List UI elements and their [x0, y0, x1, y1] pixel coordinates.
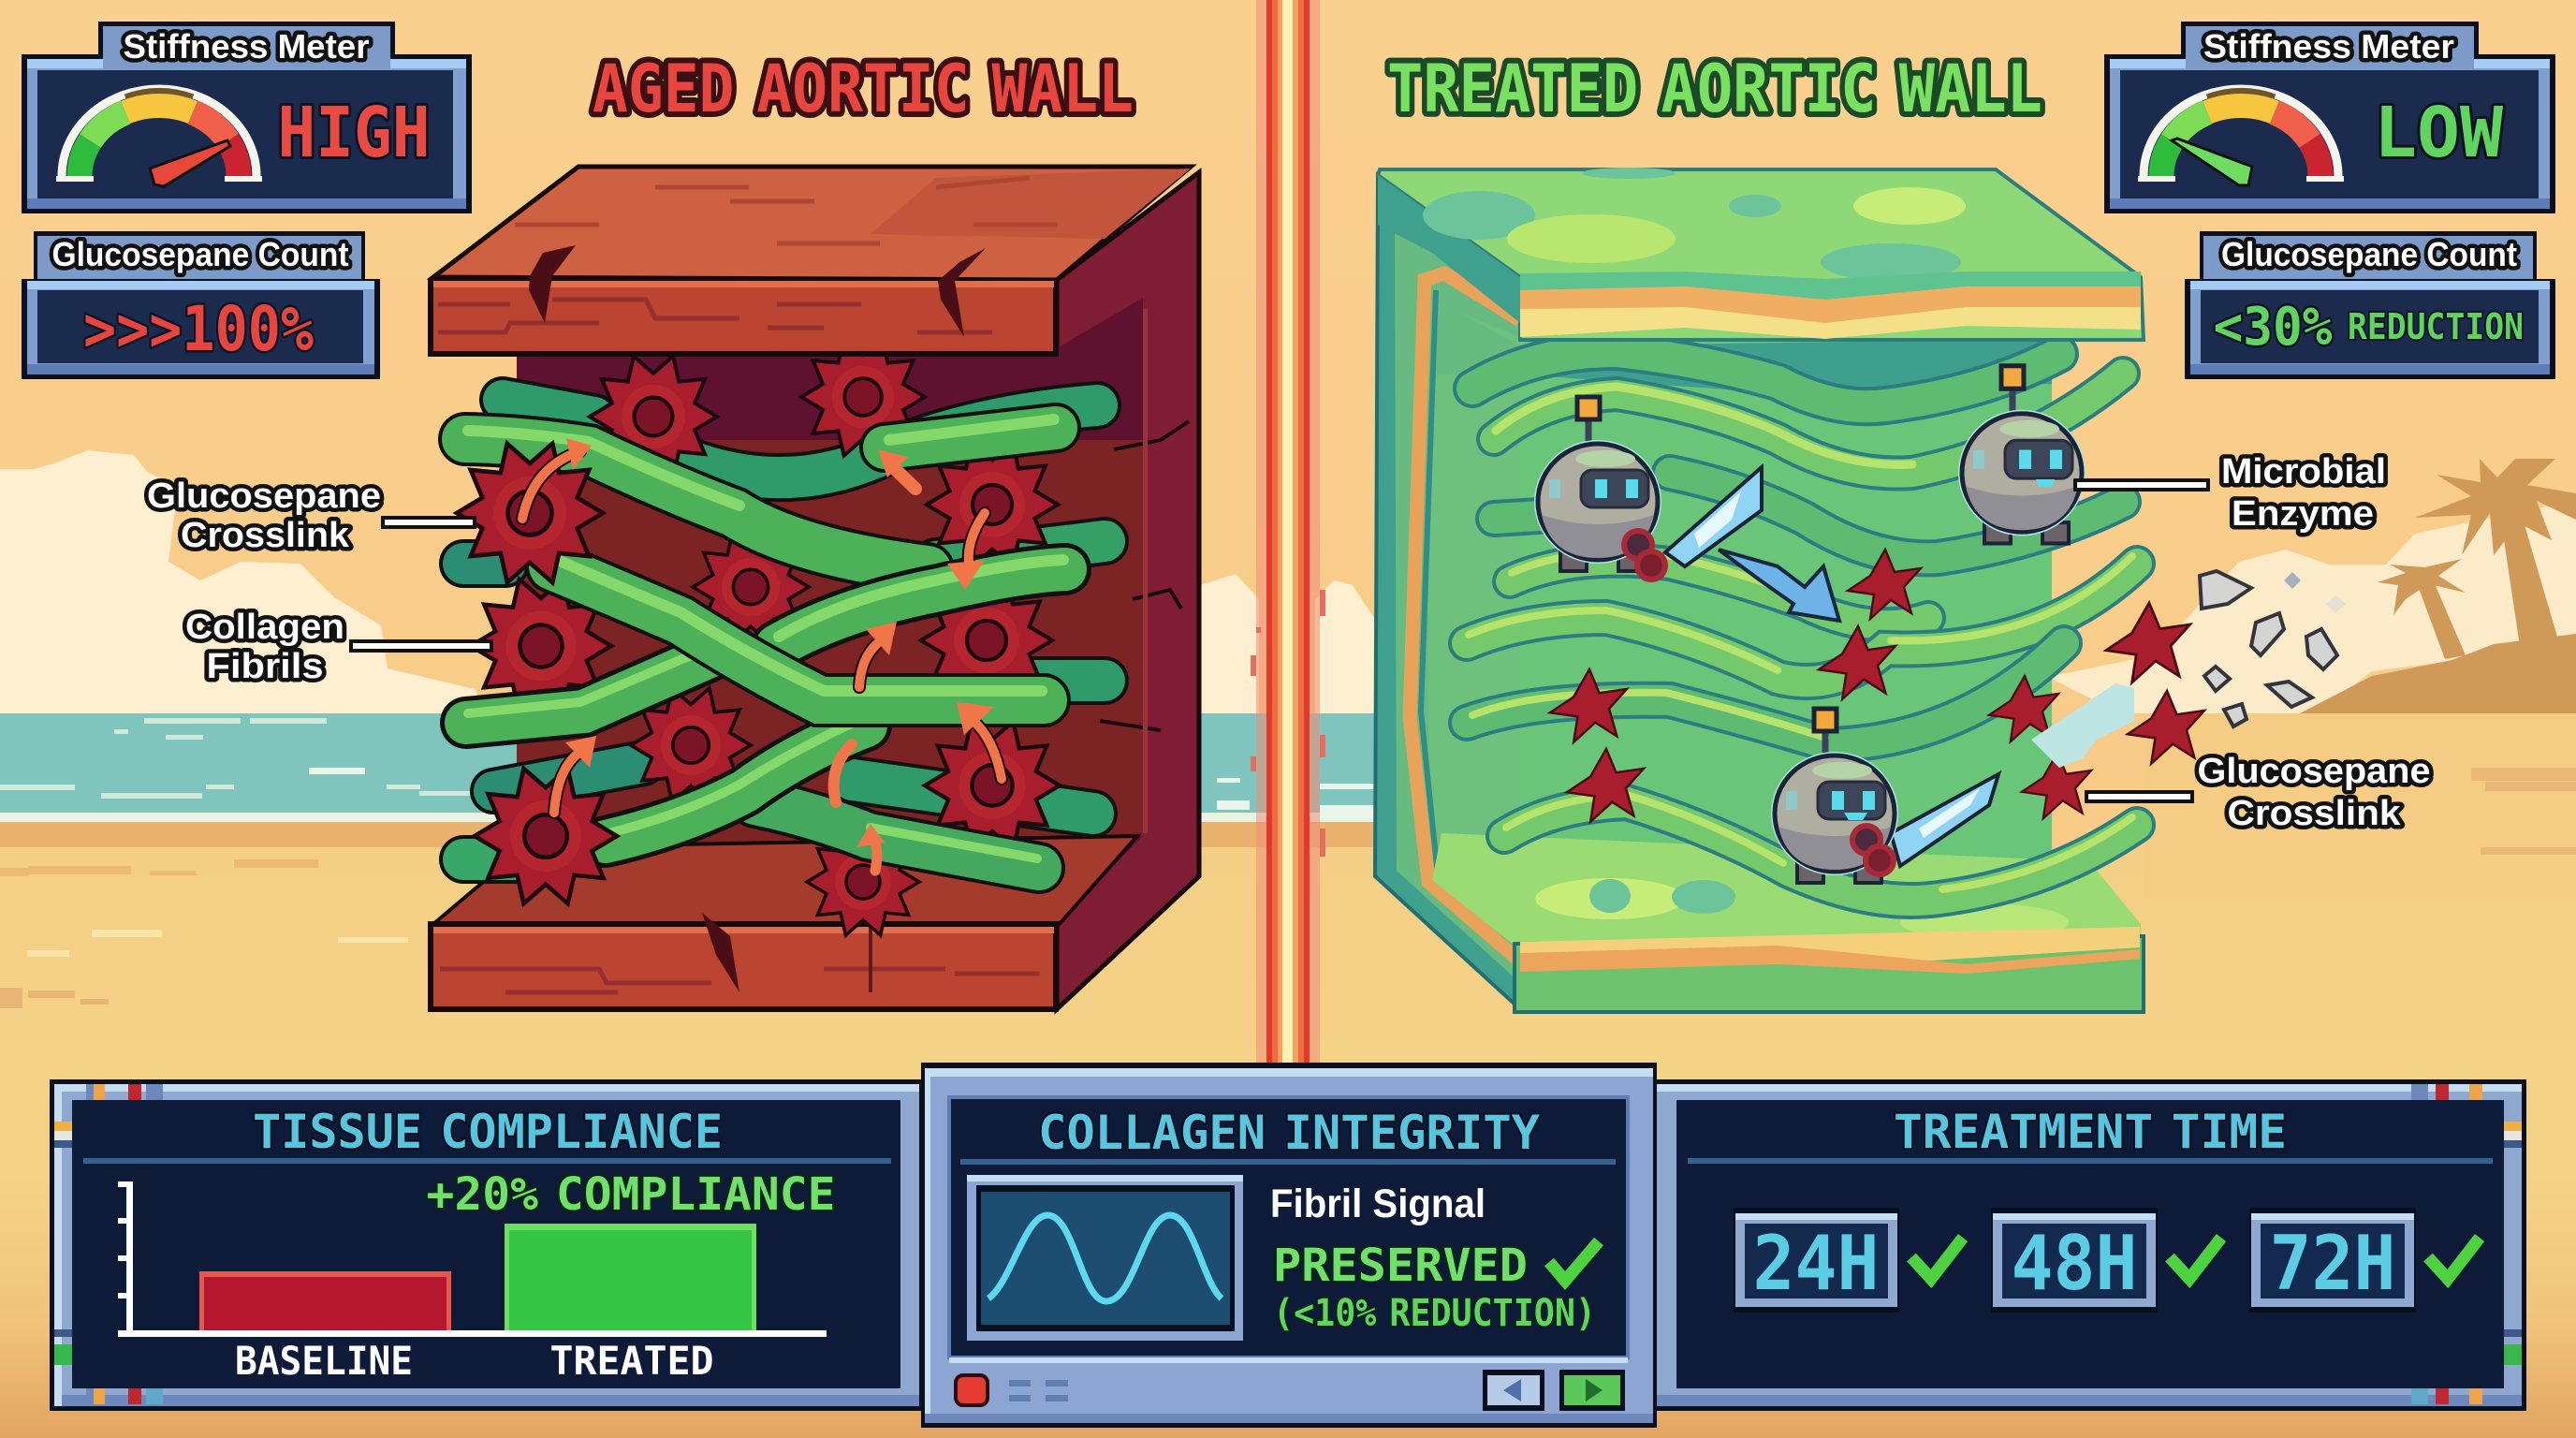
time chip: 24h: 24H	[1752, 1220, 1880, 1307]
time chip: 72h	[2249, 1208, 2416, 1313]
front collagen fibres	[465, 419, 1065, 868]
gauge: low	[2138, 89, 2344, 179]
collagen fibres, organized	[1467, 351, 2137, 901]
heading: TISSUE COMPLIANCE	[253, 1105, 723, 1159]
stiffness meter: low	[2104, 22, 2555, 213]
back collagen fibres	[463, 400, 1105, 859]
top slab	[431, 167, 1191, 354]
gauge needle: low	[2172, 139, 2252, 185]
check: 72h	[2428, 1238, 2480, 1279]
button: forward	[1559, 1370, 1625, 1411]
time chip: 48h	[1991, 1208, 2158, 1313]
title: treated aortic wall: TREATED AORTIC WALL	[1387, 51, 2042, 127]
title: aged aortic wall: AGED AORTIC WALL	[593, 51, 1134, 127]
label: collagen fibrils: Fibrils	[206, 647, 324, 686]
block left side	[1375, 175, 1520, 1009]
oscilloscope chart	[967, 1175, 1243, 1341]
label: collagen fibrils: Collagen	[185, 608, 344, 647]
indicator dashes	[1009, 1380, 1068, 1401]
time chip: 72h: 72H	[2269, 1220, 2396, 1307]
centre divider beam	[1251, 0, 1325, 1067]
orange tissue band on side	[1410, 273, 1520, 961]
heading: glucosepane count: Glucosepane Count	[2221, 235, 2517, 273]
bottom slab	[1432, 833, 2144, 1012]
text: under 10 percent reduction: (<10% REDUCTION)	[1273, 1292, 1596, 1335]
label: microbial enzyme: Enzyme	[2232, 494, 2374, 534]
label: glucosepane crosslink, aged: Crosslink	[181, 516, 350, 555]
panel: collagen integrity	[921, 1063, 1657, 1428]
palm trees	[2378, 459, 2576, 659]
panel: aged aortic wall block	[431, 167, 1199, 1009]
value: reduction: REDUCTION	[2348, 306, 2524, 347]
label: glucosepane crosslink, aged	[147, 477, 476, 555]
label: glucosepane crosslink, aged: Glucosepane	[147, 477, 381, 516]
status light	[956, 1375, 988, 1405]
callout: plus 20 percent compliance: +20% COMPLIANCE	[427, 1168, 835, 1221]
glucosepane crosslinks, rear	[471, 338, 1060, 935]
sea sparkles	[0, 718, 1374, 819]
glucosepane count: treated	[2185, 231, 2555, 379]
button: back	[1483, 1370, 1544, 1411]
island silhouette	[2300, 634, 2576, 713]
text: fibril signal: Fibril Signal	[1270, 1181, 1486, 1226]
value: high: HIGH	[277, 93, 431, 173]
block right side	[1057, 172, 1199, 1009]
debris shards	[2200, 571, 2346, 726]
dust cloud behind debris	[2048, 506, 2576, 713]
gauge: high	[56, 89, 262, 179]
glucosepane count: aged	[22, 231, 380, 379]
value: low: LOW	[2374, 93, 2503, 173]
bar label: baseline: BASELINE	[235, 1338, 413, 1384]
check: 24h	[1911, 1238, 1963, 1279]
label: glucosepane crosslink, treated: Crosslink	[2228, 794, 2401, 833]
heading: stiffness meter: Stiffness Meter	[2203, 27, 2454, 66]
panel: treated aortic wall block	[1375, 168, 2346, 1012]
enzyme travel arrow	[1719, 550, 1839, 621]
panel: treatment time	[1654, 1079, 2526, 1411]
label: microbial enzyme: Microbial	[2221, 452, 2386, 492]
time chip: 48h: 48H	[2011, 1220, 2138, 1307]
block cavity	[517, 298, 1143, 922]
glucosepane crosslinks, front	[457, 444, 617, 903]
enzyme robot 1 with blade	[1534, 397, 1762, 580]
top slab	[1378, 168, 2144, 340]
bottom slab	[431, 836, 1137, 1009]
residual crosslink stars	[1550, 550, 2204, 822]
bar label: treated: TREATED	[550, 1338, 713, 1384]
enzyme robot 3 with blade	[1771, 709, 1998, 883]
stiffness meter: high	[22, 22, 472, 213]
check: preserved	[1549, 1241, 1599, 1281]
heading: TREATMENT TIME	[1894, 1105, 2287, 1159]
gauge needle: high	[150, 140, 230, 186]
label: glucosepane crosslink, treated	[2085, 752, 2430, 833]
check: 48h	[2170, 1238, 2221, 1279]
enzyme robot 2	[1958, 366, 2086, 543]
crosslink strain arrows	[522, 438, 1002, 871]
text: preserved: PRESERVED	[1273, 1240, 1528, 1292]
label: glucosepane crosslink, treated: Glucosepane	[2198, 752, 2430, 791]
bar chart	[118, 1181, 827, 1384]
heading: stiffness meter: Stiffness Meter	[124, 27, 369, 66]
broken blade fragment	[2031, 683, 2134, 768]
panel: tissue compliance	[50, 1079, 922, 1411]
heading: glucosepane count: Glucosepane Count	[52, 235, 349, 273]
heading: COLLAGEN INTEGRITY	[1038, 1106, 1540, 1160]
time chip: 24h	[1734, 1208, 1899, 1313]
label: collagen fibrils	[185, 608, 493, 686]
label: microbial enzyme	[2073, 452, 2386, 534]
block cavity	[1428, 300, 2052, 944]
value: under 30 percent: <30%	[2213, 297, 2333, 358]
value: over 100 percent: >>>100%	[83, 293, 314, 365]
